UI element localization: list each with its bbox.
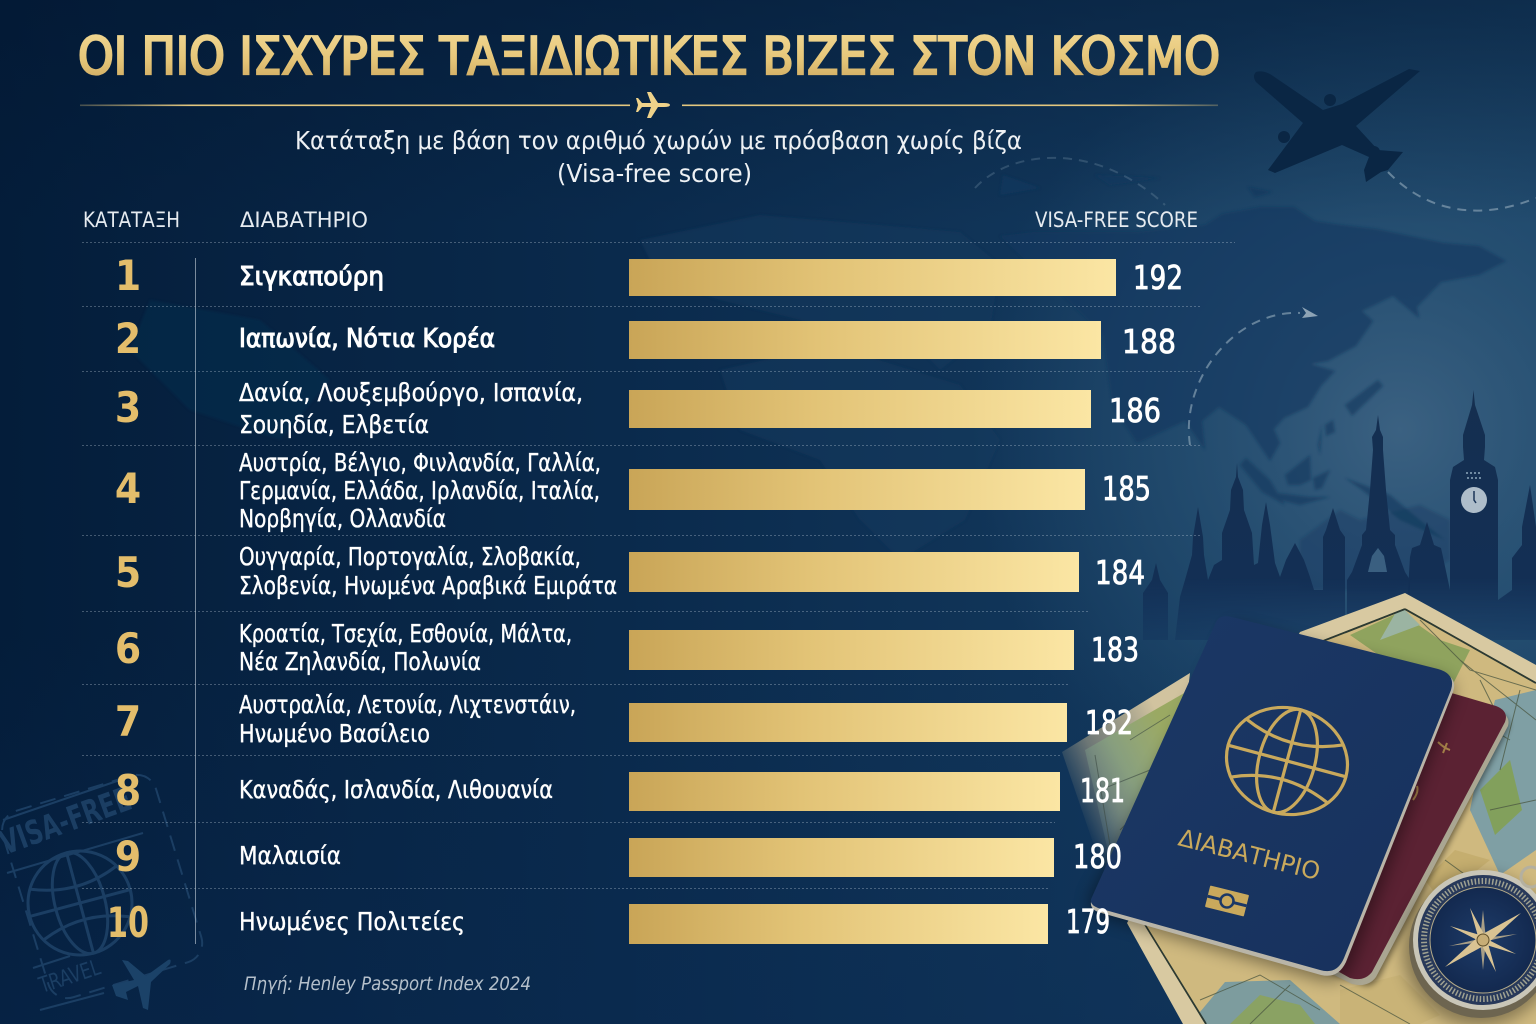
row 4: Γερμανία, Ελλάδα, Ιρλανδία, Ιταλία, [239,476,600,505]
compass ring [1521,867,1536,887]
maroon passport [1320,692,1509,986]
subtitle: Κατάταξη με βάση τον αριθμό χωρών με πρόσβαση χωρίς βίζα [295,126,1022,155]
domed churches, left cluster [1143,463,1345,640]
row 7: Ηνωμένο Βασίλειο [239,719,430,748]
world map backdrop [130,175,1506,590]
city skyline silhouettes [1143,390,1536,640]
row 4: 4 [115,464,141,513]
row 2 [115,314,1176,363]
subtitle: (Visa-free score) [557,159,752,188]
table header: ΔΙΑΒΑΤΗΡΙΟ [240,208,368,232]
title: ΟΙ ΠΙΟ ΙΣΧΥΡΕΣ ΤΑΞΙΔΙΩΤΙΚΕΣ ΒΙΖΕΣ ΣΤΟΝ ΚΟΣΜΟ [78,27,1220,87]
row 10 [107,898,1110,947]
row 7: 182 [1085,703,1133,742]
passport cover [1091,616,1452,971]
row 8: Καναδάς, Ισλανδία, Λιθουανία [239,775,553,804]
source note: Πηγή: Henley Passport Index 2024 [244,973,531,995]
passport page edges [1091,620,1454,976]
compass [1403,870,1536,1024]
small towers, right cluster [1405,485,1536,640]
row 8 [115,766,1125,815]
table header [83,208,1198,232]
row 1: Σιγκαπούρη [239,262,384,292]
row 5: Σλοβενία, Ηνωμένα Αραβικά Εμιράτα [239,571,617,600]
row 3: 3 [115,383,141,432]
row 5: 5 [115,548,141,597]
blue passport [1089,616,1454,981]
row 9 [115,832,1122,881]
row 5: Ουγγαρία, Πορτογαλία, Σλοβακία, [239,542,581,571]
row 4: Νορβηγία, Ολλανδία [239,504,446,533]
row 5: 184 [1095,553,1145,592]
row 3 [115,378,1161,439]
row 2: 2 [115,314,141,363]
table header: ΚΑΤΑΤΑΞΗ [83,208,180,232]
passport label: ΔΙΑΒΑΤΗΡΙΟ [1176,824,1323,886]
row 6: 183 [1091,630,1139,669]
compass rose [1445,908,1521,972]
row 7: 7 [115,697,141,746]
icon: aeroplane silhouette [1254,69,1420,182]
row 1: 1 [115,251,141,300]
row 9: 180 [1073,837,1122,876]
stamp globe [16,839,144,967]
row 9: Μαλαισία [239,841,341,870]
stamp label: travel: TRAVEL [35,955,104,999]
icon: Big Ben clock face and windows [1368,473,1487,572]
row 6: Κροατία, Τσεχία, Εσθονία, Μάλτα, [239,619,572,648]
subtitle [295,126,1022,188]
row 7: Αυστραλία, Λετονία, Λιχτενστάιν, [239,690,576,719]
row 1: 192 [1133,258,1183,297]
row 6: 6 [115,624,141,673]
row 4: 185 [1102,469,1151,508]
row 7 [115,690,1133,748]
row 3: Δανία, Λουξεμβούργο, Ισπανία, [239,378,583,407]
Big Ben [1450,390,1498,640]
stamp plane [112,960,171,1010]
Eiffel tower [1347,415,1410,640]
row 4: Αυστρία, Βέλγιο, Φινλανδία, Γαλλία, [239,448,601,477]
row 10: Ηνωμένες Πολιτείες [239,907,465,936]
row 10: 179 [1066,902,1110,941]
row 10: 10 [107,898,149,947]
row 4 [115,448,1151,533]
icon: gold globe emblem [1214,694,1360,828]
row 2: 188 [1122,322,1176,361]
table header: VISA-FREE SCORE [1035,208,1198,232]
row 3: Σουηδία, Ελβετία [239,410,429,439]
title divider with plane [80,92,1218,118]
icon: route arrow head [1302,307,1318,318]
faint visa-free stamp [0,770,207,1010]
row 1 [115,251,1183,300]
travel maps under passports [1062,593,1536,1024]
flight path dashed arcs [975,158,1536,445]
row 5 [115,542,1145,600]
row 8: 8 [115,766,141,815]
icon: biometric chip [1205,885,1249,917]
row 8: 181 [1080,771,1125,810]
row 6: Νέα Ζηλανδία, Πολωνία [239,647,481,676]
row 6 [115,619,1139,676]
row 9: 9 [115,832,141,881]
row 2: Ιαπωνία, Νότια Κορέα [239,324,495,354]
row 3: 186 [1109,391,1161,430]
